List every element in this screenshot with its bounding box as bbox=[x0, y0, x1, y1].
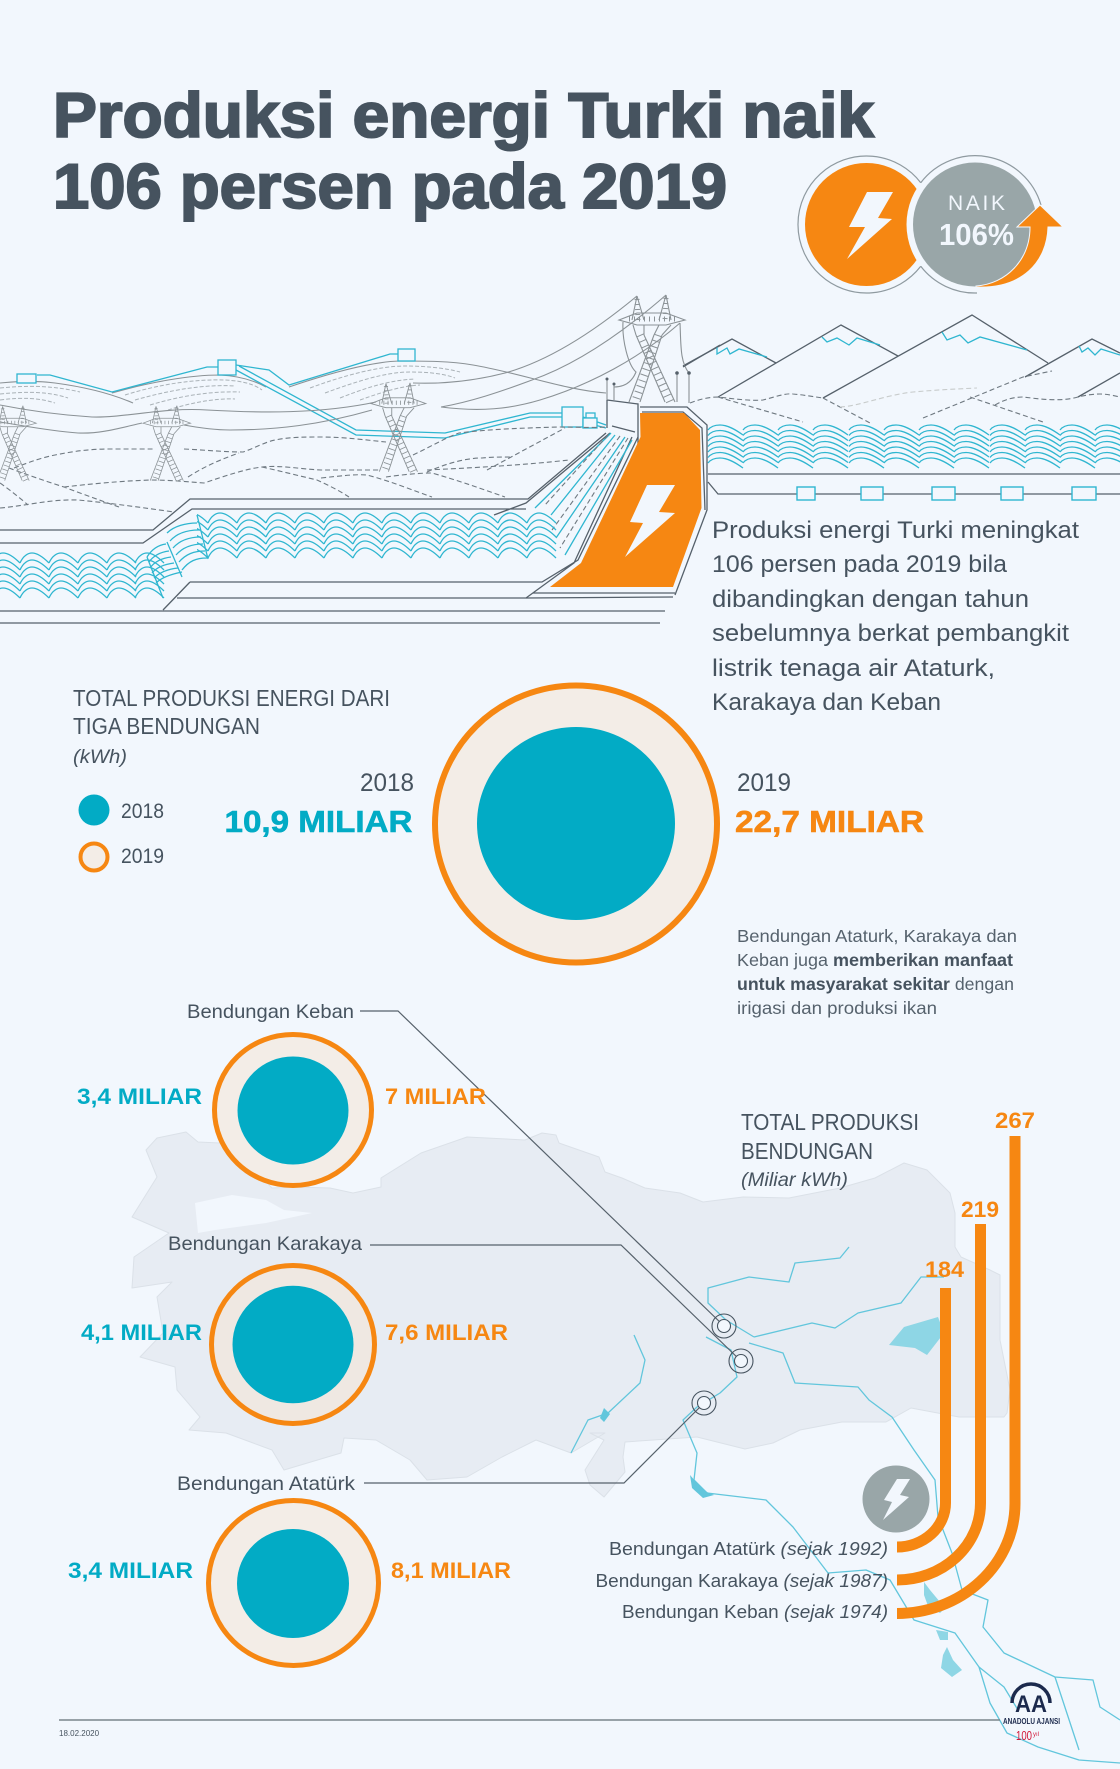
intro paragraph bbox=[712, 517, 1079, 716]
chart: total circles bbox=[435, 686, 717, 962]
illustration: teal transmission wires bbox=[17, 349, 606, 438]
panel: Keban bbox=[77, 1001, 486, 1186]
heading: total production: (kWh) bbox=[73, 747, 127, 768]
panel: Ataturk bbox=[68, 1473, 511, 1666]
illustration: dam bbox=[550, 345, 720, 595]
illustration: hills bbox=[0, 361, 606, 410]
heading: dam total: BENDUNGAN bbox=[741, 1138, 873, 1164]
heading: dam total bbox=[741, 1109, 919, 1191]
dam wall bbox=[550, 413, 702, 587]
illustration: water waves left bbox=[0, 553, 164, 598]
intro paragraph: Produksi energi Turki meningkat bbox=[712, 517, 1079, 544]
illustration: dashed contour lines bbox=[0, 427, 606, 512]
logo: Anadolu Ajansi: 100 bbox=[1016, 1728, 1032, 1743]
badge: naik 106% bbox=[798, 156, 1063, 293]
values 2018: 2018 bbox=[360, 769, 414, 797]
benefits paragraph: Bendungan Ataturk, Karakaya dan bbox=[737, 926, 1017, 946]
illustration: pylons and power lines bbox=[0, 295, 689, 481]
heading: total production: TIGA BENDUNGAN bbox=[73, 713, 260, 739]
bar values bbox=[925, 1108, 1035, 1282]
bar values: 219 bbox=[961, 1197, 999, 1222]
panel: Ataturk: 3,4 MILIAR bbox=[68, 1558, 193, 1583]
benefits paragraph: irigasi dan produksi ikan bbox=[737, 998, 937, 1018]
badge: naik 106%: NAIK bbox=[948, 192, 1005, 215]
illustration: ground lines and spillway bbox=[0, 433, 675, 623]
icon: grey lightning circle bbox=[862, 1466, 930, 1532]
illustration: mountains bbox=[683, 315, 1120, 423]
logo: Anadolu Ajansi: AA bbox=[1015, 1691, 1047, 1718]
illustration: water waves right bbox=[708, 425, 1120, 468]
values 2018: 10,9 MILIAR bbox=[224, 804, 412, 839]
logo: Anadolu Ajansi: yıl bbox=[1033, 1732, 1039, 1738]
panel: Ataturk: Bendungan Atatürk bbox=[177, 1473, 355, 1495]
intro paragraph: dibandingkan dengan tahun bbox=[712, 586, 1029, 613]
values 2019: 22,7 MILIAR bbox=[735, 804, 924, 839]
chart: curved bars bbox=[897, 1136, 1015, 1614]
legend bbox=[78, 794, 164, 870]
heading: total production: TOTAL PRODUKSI ENERGI DARI bbox=[73, 685, 390, 711]
logo: Anadolu Ajansi: ANADOLU AJANSI bbox=[1003, 1717, 1060, 1726]
title: Produksi energi Turki naik bbox=[53, 81, 875, 151]
arrow bbox=[976, 205, 1063, 287]
icon: lightning bbox=[847, 192, 893, 259]
bar labels: Bendungan Atatürk (sejak 1992) bbox=[609, 1538, 888, 1559]
values 2019 bbox=[735, 769, 924, 839]
intro paragraph: sebelumnya berkat pembangkit bbox=[712, 620, 1069, 647]
title: 106 persen pada 2019 bbox=[53, 152, 727, 222]
leader lines and dam markers bbox=[360, 1011, 753, 1483]
panel: Karakaya bbox=[81, 1233, 508, 1424]
values 2018 bbox=[224, 769, 414, 839]
benefits paragraph: Keban juga memberikan manfaat bbox=[737, 950, 1013, 970]
bar values: 184 bbox=[925, 1257, 965, 1282]
bar labels: Bendungan Keban (sejak 1974) bbox=[622, 1601, 888, 1622]
intro paragraph: listrik tenaga air Ataturk, bbox=[712, 655, 995, 682]
bar labels bbox=[596, 1538, 888, 1622]
values 2019: 2019 bbox=[737, 769, 791, 797]
panel: Karakaya: Bendungan Karakaya bbox=[168, 1233, 362, 1255]
benefits paragraph bbox=[737, 926, 1017, 1018]
panel: Ataturk: 8,1 MILIAR bbox=[391, 1558, 511, 1583]
illustration: ground line with boxes bbox=[708, 474, 1120, 500]
rivers bbox=[571, 1247, 1120, 1763]
panel: Karakaya: 4,1 MILIAR bbox=[81, 1320, 202, 1345]
heading: total production bbox=[73, 685, 390, 768]
heading: dam total: (Miliar kWh) bbox=[741, 1170, 848, 1191]
legend: 2018 bbox=[121, 800, 164, 823]
footer rule and date: 18.02.2020 bbox=[59, 1729, 100, 1738]
title bbox=[53, 81, 875, 222]
bar values: 267 bbox=[995, 1108, 1035, 1133]
icon: lightning on dam bbox=[625, 485, 675, 557]
logo: Anadolu Ajansi bbox=[1003, 1684, 1060, 1743]
badge: naik 106%: 106% bbox=[939, 217, 1014, 252]
panel: Keban: Bendungan Keban bbox=[187, 1001, 354, 1023]
panel: Keban: 3,4 MILIAR bbox=[77, 1084, 202, 1109]
heading: dam total: TOTAL PRODUKSI bbox=[741, 1109, 919, 1135]
legend: 2019 bbox=[121, 845, 164, 868]
intro paragraph: Karakaya dan Keban bbox=[712, 689, 941, 716]
icon: Lake Van bbox=[889, 1317, 944, 1355]
benefits paragraph: untuk masyarakat sekitar dengan bbox=[737, 974, 1014, 994]
intro paragraph: 106 persen pada 2019 bila bbox=[712, 551, 1008, 578]
panel: Karakaya: 7,6 MILIAR bbox=[385, 1320, 508, 1345]
bar labels: Bendungan Karakaya (sejak 1987) bbox=[596, 1570, 888, 1591]
panel: Keban: 7 MILIAR bbox=[385, 1084, 486, 1109]
map of Turkey with rivers bbox=[132, 1132, 1120, 1763]
illustration: water waves center bbox=[147, 513, 556, 598]
